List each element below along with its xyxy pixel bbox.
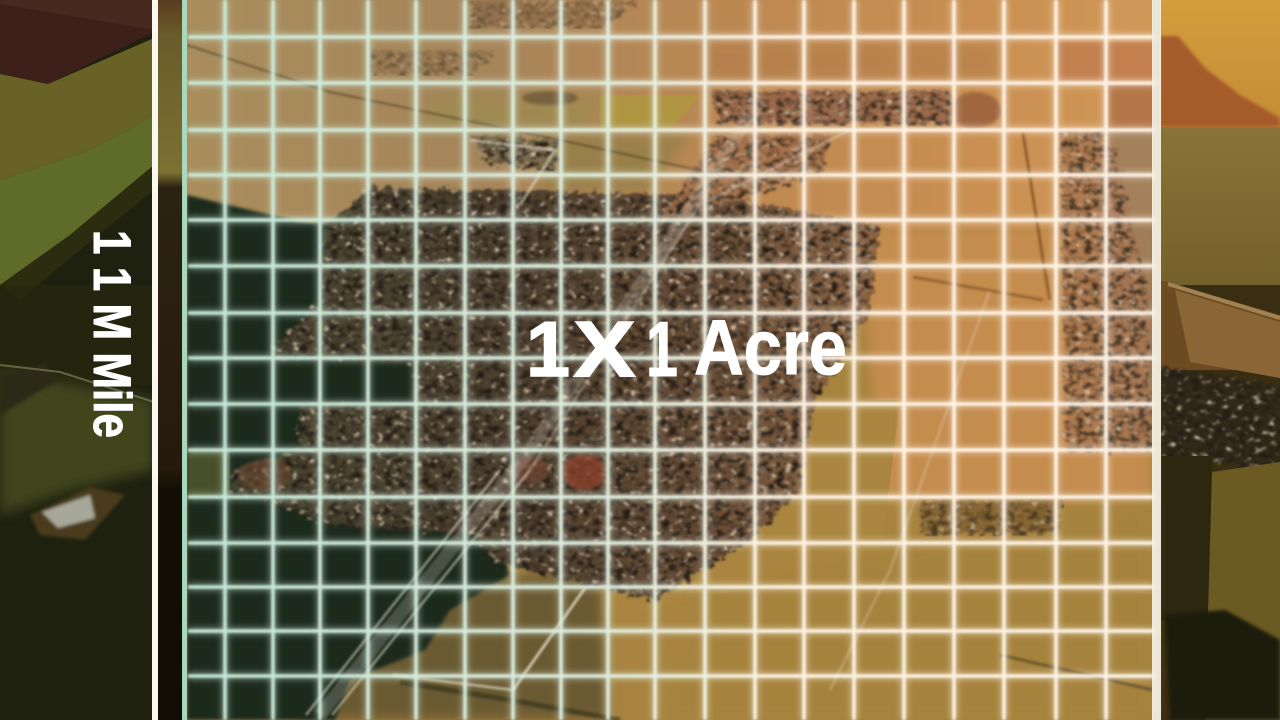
label: 1 X 1 Acre: 1 xyxy=(646,305,678,393)
overlay left border xyxy=(182,0,187,720)
chart: acre grid glow xyxy=(188,0,1155,720)
panel: gutter beside overlay xyxy=(158,0,183,720)
overlay right border xyxy=(1152,0,1161,720)
icon: farm building xyxy=(30,487,125,540)
map: settlement blocks xyxy=(230,0,1150,600)
label: 1 Mile scale: 1 1 M Mile xyxy=(82,230,141,438)
label: 1 X 1 Acre: Acre xyxy=(694,303,847,391)
map: roads and plot outlines xyxy=(187,45,1153,720)
label: 1 X 1 Acre xyxy=(526,303,847,393)
panel: right farmland strip xyxy=(1160,0,1280,720)
label: 1 X 1 Acre: X xyxy=(574,305,635,393)
panel: translucent acre overlay xyxy=(183,0,1153,720)
panel: left farmland strip xyxy=(0,0,154,720)
label: 1 X 1 Acre: 1 xyxy=(526,305,570,393)
icon: trees xyxy=(1165,610,1280,720)
chart: acre grid lines xyxy=(188,0,1155,720)
scale line: one mile xyxy=(152,0,158,720)
